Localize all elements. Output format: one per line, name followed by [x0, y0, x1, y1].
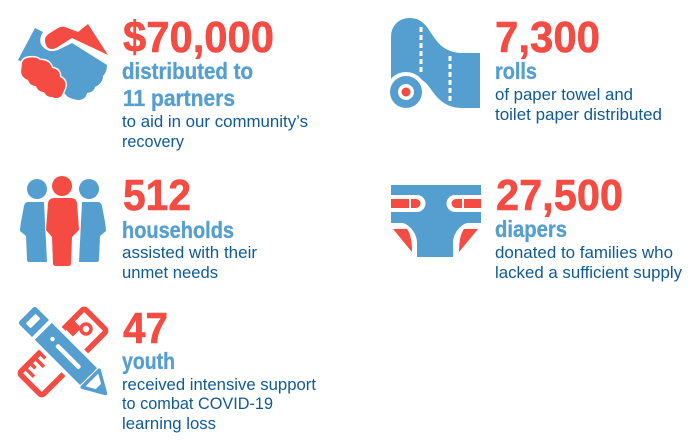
stat: 512: 512	[123, 171, 191, 220]
text: learning loss: learning loss	[122, 415, 216, 433]
panel: partners funding	[18, 13, 308, 151]
panel: youth	[15, 303, 316, 433]
heading: distributed to: distributed to	[122, 58, 253, 84]
stat: 27,500: 27,500	[496, 171, 623, 220]
heading: diapers: diapers	[495, 216, 567, 242]
text: unmet needs: unmet needs	[122, 264, 218, 282]
text: recovery: recovery	[122, 133, 185, 151]
icon: three people	[20, 176, 106, 266]
icon: paper towel roll	[386, 18, 480, 112]
heading: 11 partners: 11 partners	[123, 85, 235, 111]
text: to aid in our community's: to aid in our community’s	[122, 113, 308, 131]
text: lacked a sufficient supply: lacked a sufficient supply	[495, 264, 683, 282]
icon: pencil and ruler	[15, 303, 117, 405]
panel: paper rolls	[386, 13, 662, 124]
text: toilet paper distributed: toilet paper distributed	[495, 106, 662, 124]
stat: $70,000: $70,000	[123, 13, 274, 62]
stat: 7,300: 7,300	[495, 13, 600, 62]
panel: diapers	[391, 171, 683, 282]
text: of paper towel and: of paper towel and	[495, 86, 633, 104]
heading: youth: youth	[122, 348, 175, 374]
text: assisted with their: assisted with their	[122, 244, 258, 262]
stat: 47: 47	[123, 304, 168, 353]
heading: rolls: rolls	[495, 58, 537, 84]
icon: diaper	[391, 185, 481, 257]
panel: households	[20, 171, 258, 282]
icon: handshake	[18, 24, 108, 100]
text: donated to families who: donated to families who	[495, 244, 673, 262]
text: to combat COVID-19: to combat COVID-19	[122, 395, 273, 413]
text: received intensive support: received intensive support	[122, 376, 316, 394]
heading: households: households	[122, 217, 234, 243]
